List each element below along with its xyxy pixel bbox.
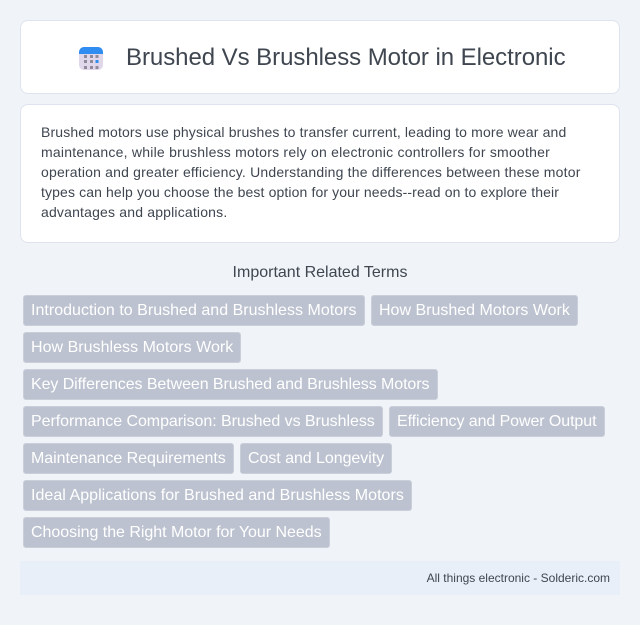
tag list: Key Differences Between Brushed and Brushless Motors: [31, 376, 429, 393]
intro text: [41, 124, 581, 220]
tag list: Efficiency and Power Output: [397, 413, 596, 430]
tag list: Maintenance Requirements: [31, 450, 226, 467]
tag list: Ideal Applications for Brushed and Brushless Motors: [31, 487, 404, 504]
header card: [20, 20, 620, 94]
tag list: Performance Comparison: Brushed vs Brushless: [31, 413, 375, 430]
icon: calendar: [79, 47, 103, 70]
intro text: advantages and applications.: [41, 204, 227, 220]
tag list: Cost and Longevity: [248, 450, 384, 467]
footer: All things electronic - Solderic.com: [427, 571, 610, 585]
section heading: Important Related Terms: [233, 264, 407, 281]
intro text: operation and greater efficiency. Understanding the differences between these motor: [41, 164, 581, 180]
intro text: types can help you choose the best option for your needs--read on to explore their: [41, 184, 559, 200]
intro text panel: [20, 104, 620, 243]
title: Brushed Vs Brushless Motor in Electronic: [126, 44, 566, 71]
tag list: [23, 295, 605, 548]
tag list: How Brushed Motors Work: [379, 302, 570, 319]
intro text: Brushed motors use physical brushes to transfer current, leading to more wear and: [41, 124, 566, 140]
tag list: How Brushless Motors Work: [31, 339, 233, 356]
tag list: Choosing the Right Motor for Your Needs: [31, 524, 322, 541]
tag list: Introduction to Brushed and Brushless Motors: [31, 302, 356, 319]
intro text: maintenance, while brushless motors rely on electronic controllers for smoother: [41, 144, 550, 160]
footer: [20, 561, 620, 595]
